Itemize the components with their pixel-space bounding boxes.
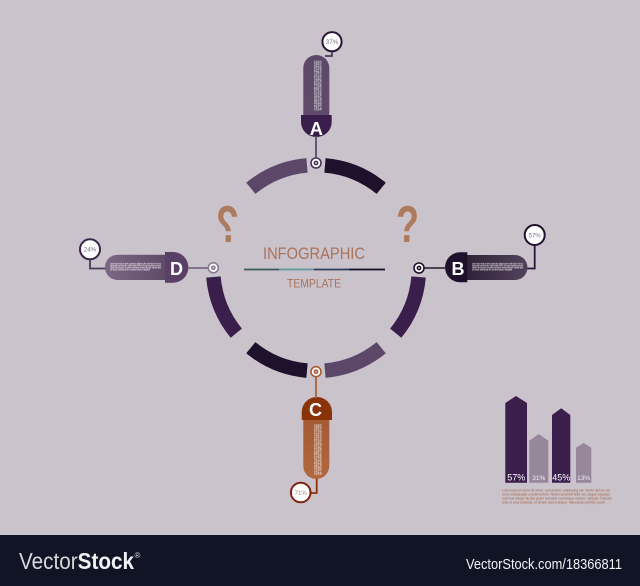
pill text D [110,262,161,272]
panel: B [414,225,545,282]
arc: top right [325,165,381,188]
pill text C: ut urna euismod et ornare ipsum aliquet maecenas porttitor ipsum dolor [319,424,323,475]
pill C [303,420,329,479]
chart caption: Lorem ipsum dolor sit amet, consectetur adipiscing elit. Morbi dictum vel [502,488,610,492]
percent connector B [527,246,535,268]
pill text A: ut urna euismod et ornare ipsum aliquet maecenas porttitor ipsum dolor [319,60,323,111]
node C [311,367,321,377]
connector D [188,267,208,269]
pill D [105,255,165,280]
cap B [445,252,467,282]
pill text B: malesuada condimentum nulla hendrerit felis nec augue egestas euismod [472,264,523,268]
pill text D: integer lacinia quam convallis scelerisque semper aliquam molestie ante [110,266,161,270]
pill text A: integer lacinia quam convallis scelerisque semper aliquam molestie ante [317,60,321,111]
percent connector C [310,478,317,493]
pill text D: ut urna euismod et ornare ipsum aliquet [110,268,150,272]
bar: 45%: 45% [552,472,570,482]
panel: C [291,367,332,502]
pill text C: Lorem ipsum dolor sit amet consectetur adipiscing elit morbi dictum vel nunc [313,424,317,475]
chart caption: ante ut urna euismod, et ornare ipsum aliquet. Maecenas porttitor ipsum. [502,500,606,504]
percent badge B: 57% [529,232,541,239]
cap D [165,252,188,283]
footer id: VectorStock.com/18366811 [466,557,622,573]
icon: left question mark: ? [216,195,239,253]
arc: bottom right [325,348,381,371]
percent badge A: 37% [326,39,339,46]
pill text C: malesuada condimentum nulla hendrerit felis nec augue egestas euismod [315,424,319,475]
letter D: D [170,259,183,279]
arc: bottom left [251,348,307,371]
connector A [315,136,317,158]
panel: D [80,239,218,283]
arc: top left [251,165,307,188]
title underline [244,269,385,270]
pill text C: integer lacinia quam convallis scelerisque semper aliquam molestie ante [317,424,321,475]
bar chart [505,396,591,483]
footer bar [0,535,640,586]
ring of arc segments [213,165,419,371]
pill text A: Lorem ipsum dolor sit amet consectetur adipiscing elit morbi dictum vel nunc [313,60,317,111]
pill text D: malesuada condimentum nulla hendrerit felis nec augue egestas euismod [110,264,161,268]
subtitle: TEMPLATE [287,278,341,290]
node B [414,263,424,273]
percent badge C: 71% [295,490,307,497]
pill B [467,255,528,280]
bar: 57%: 57% [507,472,525,482]
icon: right question mark: ? [396,195,419,253]
chart caption [502,488,612,504]
pill text B: Lorem ipsum dolor sit amet consectetur adipiscing elit morbi dictum vel nunc [472,262,523,266]
letter B: B [452,259,464,279]
pill text B: ut urna euismod et ornare ipsum aliquet [472,268,512,272]
connector B [424,267,445,269]
cap C [302,397,332,420]
arc: right [396,277,419,333]
node D [208,263,218,273]
connector C [315,377,317,398]
percent connector A [325,51,332,56]
registered mark: ® [134,551,140,560]
percent connector D [90,260,106,268]
pill text A: malesuada condimentum nulla hendrerit felis nec augue egestas euismod [315,60,319,111]
pill A [303,55,329,115]
pill text C [313,424,323,475]
chart caption: nunc malesuada condimentum. Nulla hendrerit felis nec augue egestas [502,492,610,496]
panel: A [301,32,342,168]
letter A: A [310,118,323,139]
bar: 31%: 31% [532,475,546,482]
pill text B: integer lacinia quam convallis scelerisque semper aliquam molestie ante [472,266,523,270]
arc: left [213,277,236,333]
footer logo: VectorStock [19,548,134,574]
bar: 13%: 13% [577,475,590,482]
pill text D: Lorem ipsum dolor sit amet consectetur adipiscing elit morbi dictum vel nunc [110,262,161,266]
title: INFOGRAPHIC [263,245,365,263]
pill text B [472,262,523,272]
chart caption: euismod integer lacinia quam convallis scelerisque semper. Aliquam molestie [502,496,612,500]
node A [311,158,321,168]
pill text A [313,60,323,111]
percent badge D: 24% [84,247,97,254]
letter C: C [309,400,322,420]
cap A [301,115,332,137]
